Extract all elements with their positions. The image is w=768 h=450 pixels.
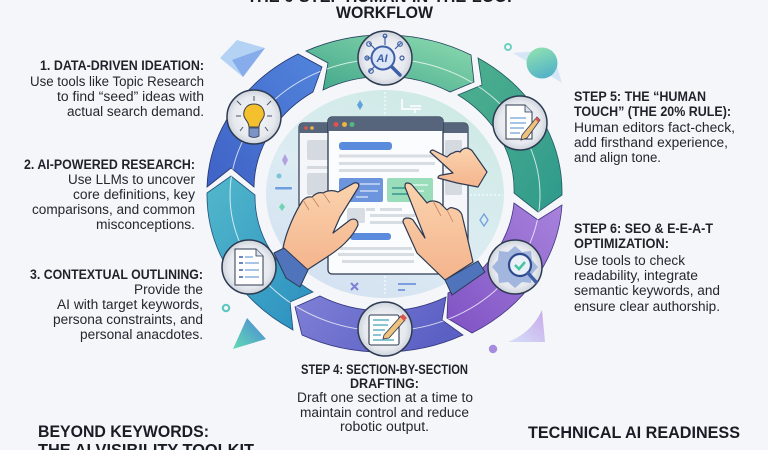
- segment: step 4 violet: [295, 296, 463, 352]
- text: step 2: [24, 157, 195, 232]
- text: step 4: Draft one section at a time to: [297, 390, 473, 405]
- decoration: green circle and ring: [505, 44, 562, 83]
- workflow ring: [207, 35, 562, 352]
- text: step 4: DRAFTING:: [350, 376, 419, 391]
- segment: step 6 purple: [447, 203, 562, 333]
- central disc: [266, 90, 504, 298]
- text: step 4: STEP 4: SECTION-BY-SECTION: [301, 362, 468, 377]
- heading: beyond keywords: BEYOND KEYWORDS:: [38, 422, 209, 441]
- text: step 6: STEP 6: SEO & E-E-A-T: [574, 221, 714, 236]
- text: step 3: 3. CONTEXTUAL OUTLINING:: [30, 267, 203, 282]
- small image box: [347, 208, 365, 223]
- text: step 6: [574, 221, 720, 314]
- segment: step 5 teal: [458, 58, 562, 212]
- text: step 5: add firsthand experience,: [574, 135, 728, 150]
- lower blue bar: [350, 233, 391, 240]
- text: step 1: Use tools like Topic Research: [30, 74, 204, 89]
- blue card: [339, 178, 383, 202]
- text: step 6: OPTIMIZATION:: [574, 236, 669, 251]
- text: step 6: ensure clear authorship.: [574, 299, 720, 314]
- icon: checklist document: [222, 240, 276, 294]
- icon: gear with magnifier: [488, 240, 542, 294]
- text: step 6: readability, integrate: [574, 268, 698, 283]
- decoration: lower right dot and quarter: [489, 310, 545, 353]
- heading: beyond keywords: [38, 422, 255, 450]
- text lines: [338, 154, 435, 263]
- text: step 2: misconceptions.: [96, 217, 195, 232]
- text: step 1: [30, 58, 204, 119]
- icon: light bulb: [227, 90, 281, 144]
- text: step 2: comparisons, and common: [32, 202, 195, 217]
- text: step 3: [30, 267, 203, 342]
- segment: step 1 blue: [207, 54, 322, 187]
- text: step 6: semantic keywords, and: [574, 283, 720, 298]
- text: step 5: TOUCH” (THE 20% RULE):: [574, 104, 731, 119]
- title: [247, 0, 518, 22]
- segment: top green: [306, 35, 474, 92]
- decoration: lower left ring and triangle: [223, 305, 266, 349]
- text: step 6: Use tools to check: [574, 253, 685, 268]
- text: step 5: STEP 5: THE “HUMAN: [574, 89, 706, 104]
- page heading bar: [339, 142, 392, 150]
- text: step 5: [574, 89, 735, 165]
- text: step 1: actual search demand.: [67, 104, 204, 119]
- browser window: back left: [299, 123, 335, 251]
- text: step 3: persona constraints, and: [53, 312, 203, 327]
- icon: AI magnifier: AI: [376, 53, 388, 65]
- icon: document and pencil in step 4: [358, 302, 412, 356]
- text: step 2: Use LLMs to uncover: [68, 172, 195, 187]
- icon: AI magnifier: [358, 31, 412, 85]
- text: step 3: Provide the: [134, 282, 203, 297]
- left hand: [274, 183, 359, 287]
- text: step 4: robotic output.: [340, 419, 429, 434]
- right hand: [403, 183, 485, 295]
- text: step 2: core definitions, key: [73, 187, 195, 202]
- text: step 2: 2. AI-POWERED RESEARCH:: [24, 157, 195, 172]
- browser window: back right: [432, 123, 468, 251]
- left cuff: [274, 248, 308, 287]
- window buttons: [334, 122, 354, 127]
- browser window: main: [328, 117, 443, 274]
- right cuff: [445, 261, 485, 295]
- upper right hand: [430, 148, 487, 187]
- text: step 5: Human editors fact-check,: [574, 120, 735, 135]
- decoration: blue diamond: [220, 40, 265, 77]
- text: step 3: AI with target keywords,: [57, 297, 203, 312]
- heading: technical AI readiness: TECHNICAL AI READINESS: [528, 423, 740, 442]
- text: step 5: and align tone.: [574, 150, 661, 165]
- text: step 1: 1. DATA-DRIVEN IDEATION:: [40, 58, 204, 73]
- text: step 4: maintain control and reduce: [300, 405, 469, 420]
- text: step 1: to find “seed” ideas with: [57, 89, 204, 104]
- icon: document with pencil: [493, 96, 547, 150]
- green card: [387, 178, 433, 202]
- segment: step 3 light blue: [207, 176, 313, 330]
- text: step 4: [297, 362, 473, 434]
- text: step 3: personal anacdotes.: [80, 327, 203, 342]
- title: WORKFLOW: [336, 3, 434, 22]
